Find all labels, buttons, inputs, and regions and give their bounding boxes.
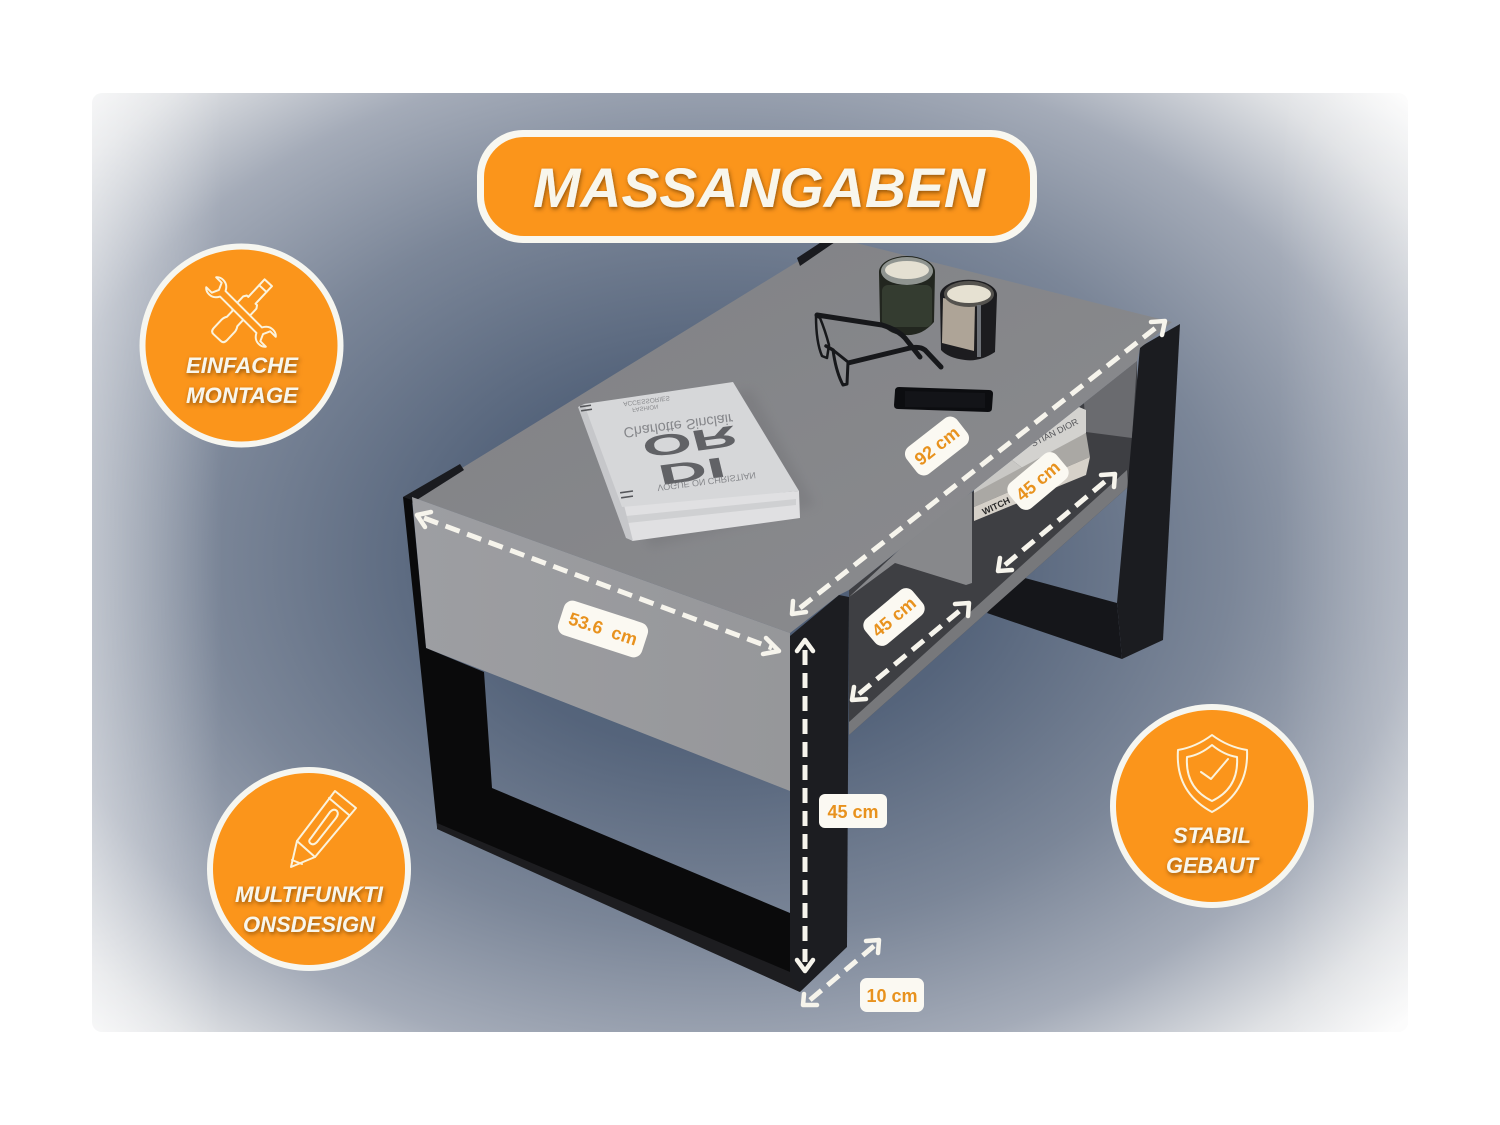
label: einfache montage [186,353,299,408]
label: 92 cm [901,413,973,479]
book on table [578,382,815,548]
arrow: 45 cm height [797,640,813,971]
icon: shield with check [1178,735,1247,812]
books on shelf [974,407,1090,521]
title text: MASSANGABEN [533,156,987,219]
label: 45 cm shelf front [860,584,928,650]
arrow: 92 cm length [792,321,1165,614]
label: multifunktionsdesign [235,882,384,937]
book on table: ACCESSORIES [623,394,671,407]
arrow: 53.6 cm width [417,512,779,654]
label: 53.6 cm: 53.6 cm [566,609,640,649]
arrow: 10 cm depth [803,940,879,1005]
icon: wrench and screwdriver [204,275,278,349]
book on table: Charlotte Sinclair [622,410,734,440]
title badge [477,130,1037,243]
book on table: FASHION [632,403,659,412]
table top surface [412,238,1172,633]
badge: einfache montage [140,244,344,448]
books on shelf: WITCH [981,495,1012,517]
background panel [92,93,1408,1032]
glasses [816,315,941,385]
label: stabil gebaut: STABIL [1173,823,1251,848]
back right leg lower bar [987,578,1122,659]
label: 10 cm [860,978,924,1012]
label: multifunktionsdesign: MULTIFUNKTI [235,882,384,907]
badge: stabil gebaut [1110,704,1314,908]
label: multifunktionsdesign: ONSDESIGN [243,912,376,937]
label: 10 cm: 10 cm [866,986,918,1006]
back right leg post [1117,324,1180,659]
label: 92 cm: 92 cm [911,422,963,470]
label: stabil gebaut [1166,823,1260,878]
shelf compartment [849,361,1137,735]
icon: pencil [291,791,356,867]
coffee table [403,235,1180,992]
label: 45 cm shelf front: 45 cm [868,593,920,641]
label: 45 cm height [819,794,887,828]
book on table: VOGUE ON CHRISTIAN [657,470,756,493]
badge: multifunktionsdesign [207,767,411,971]
arrow: 45 cm shelf front [852,603,969,700]
front panel [412,497,790,791]
label: einfache montage: EINFACHE [186,353,299,378]
label: stabil gebaut: GEBAUT [1166,853,1260,878]
black corner strips [403,235,838,503]
label: einfache montage: MONTAGE [186,383,299,408]
phone [894,387,993,412]
book on table: OR [638,419,741,464]
candle: beige [940,280,997,360]
label: 45 cm height: 45 cm [827,802,879,822]
books on shelf: STIAN DIOR [1029,416,1080,449]
front leg [790,595,849,992]
left leg frame [403,497,800,992]
label: 45 cm shelf back: 45 cm [1012,457,1064,505]
label: 45 cm shelf back [1004,448,1072,514]
book on table: DI [654,451,729,491]
candle: green [879,256,935,335]
label: 53.6 cm [556,598,650,660]
arrow: 45 cm shelf back [998,474,1115,571]
